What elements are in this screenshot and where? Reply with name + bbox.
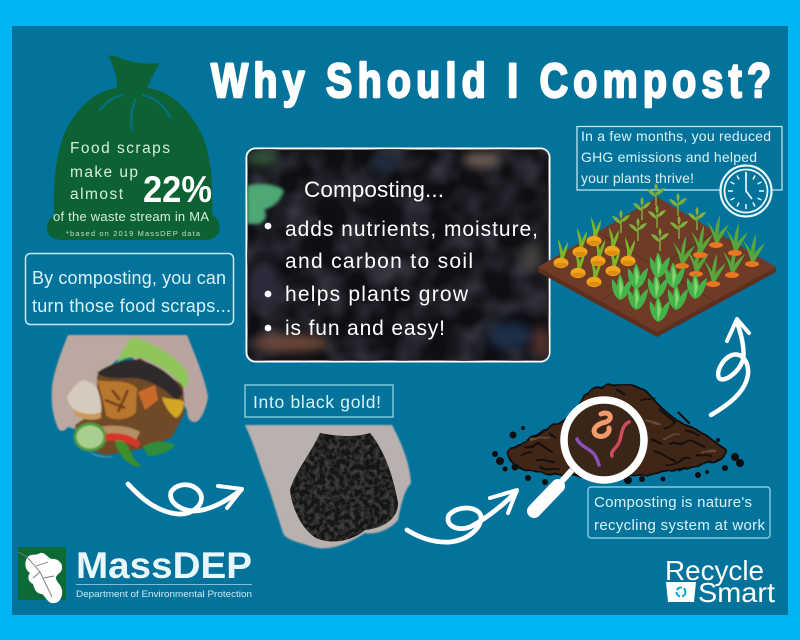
arrow: up to garden bbox=[711, 319, 749, 415]
callout: nature's recycling bbox=[588, 487, 770, 538]
worms bbox=[594, 413, 610, 436]
title: Why Should I Compost? bbox=[211, 54, 771, 108]
scraps base bbox=[75, 358, 185, 455]
icon: oak leaf bbox=[18, 547, 66, 603]
eggshell bbox=[67, 380, 101, 417]
green pepper bbox=[115, 440, 141, 467]
bag shape bbox=[47, 55, 220, 240]
stat text: Food scraps bbox=[70, 140, 170, 157]
photo: food scraps in hands bbox=[52, 335, 208, 467]
leafy greens bbox=[612, 252, 707, 322]
red pepper bbox=[105, 433, 140, 448]
benefits list bbox=[265, 218, 538, 340]
callout: GHG: GHG emissions and helped bbox=[581, 149, 757, 165]
compost pile with worms bbox=[492, 384, 744, 511]
icon: trash bag with statistic: of the waste stream in MA bbox=[53, 209, 209, 224]
compost heap bbox=[290, 433, 398, 541]
benefits list: helps plants grow bbox=[285, 283, 469, 306]
callout: nature's recycling: recycling system at work bbox=[594, 517, 766, 534]
arrow: scraps to black gold bbox=[128, 484, 242, 514]
callout: by composting: By composting, you can bbox=[32, 268, 226, 288]
logo: RecycleSmart: Smart bbox=[698, 577, 775, 608]
green leaf in photo bbox=[247, 184, 284, 224]
benefits list: is fun and easy! bbox=[285, 317, 445, 340]
benefits list: adds nutrients, moisture, bbox=[285, 218, 538, 241]
callout: by composting: turn those food scraps... bbox=[32, 296, 231, 316]
yellow peel bbox=[162, 397, 184, 418]
carrots bbox=[673, 215, 765, 287]
dark peel bbox=[97, 360, 183, 402]
photo: compost in hands bbox=[245, 425, 411, 548]
callout: GHG bbox=[577, 126, 782, 190]
benefits heading: Composting... bbox=[304, 177, 444, 202]
sprouts bbox=[612, 183, 706, 251]
pile bbox=[507, 384, 727, 476]
garden plot bbox=[538, 183, 776, 337]
icon: trash bag with statistic bbox=[47, 55, 220, 240]
soil crumbs bbox=[492, 426, 744, 485]
right hand bbox=[126, 335, 208, 422]
logo: RecycleSmart bbox=[665, 555, 775, 608]
icon: trash bag with statistic: make up bbox=[70, 164, 138, 181]
dark green leaf bbox=[143, 442, 175, 456]
panel: composting benefits bbox=[246, 148, 550, 362]
bag creases bbox=[100, 95, 170, 130]
logo: MassDEP: MassDEP bbox=[76, 545, 252, 586]
callout: nature's recycling: Composting is nature's bbox=[594, 494, 752, 511]
callout: into black gold: Into black gold! bbox=[253, 392, 381, 412]
lettuce bbox=[117, 337, 188, 388]
callout: into black gold bbox=[245, 385, 393, 417]
icon: clock bbox=[720, 166, 772, 216]
icon: recycling bin bbox=[666, 582, 696, 602]
logo: MassDEP: Department of Environmental Protection bbox=[76, 589, 252, 600]
fingers below bbox=[88, 452, 118, 457]
icon: trash bag with statistic: *based on 2019 MassDEP data bbox=[66, 229, 201, 238]
callout: GHG: In a few months, you reduced bbox=[581, 128, 771, 144]
orange scraps bbox=[97, 380, 137, 419]
benefits list: and carbon to soil bbox=[285, 250, 473, 273]
cucumber bbox=[74, 422, 106, 452]
logo: MassDEP bbox=[18, 545, 252, 603]
soil base bbox=[538, 267, 776, 337]
22 percent: 22% bbox=[143, 169, 212, 210]
callout: GHG: your plants thrive! bbox=[581, 170, 694, 186]
hands bbox=[245, 425, 411, 548]
tan scraps bbox=[100, 426, 140, 440]
magnifier bbox=[534, 400, 644, 511]
arrow: black gold to pile bbox=[407, 490, 517, 542]
icon: trash bag with statistic: almost bbox=[70, 186, 124, 203]
logo: RecycleSmart: Recycle bbox=[665, 555, 764, 586]
onions bbox=[554, 217, 636, 287]
left hand bbox=[52, 335, 130, 431]
callout: by composting bbox=[26, 254, 234, 324]
